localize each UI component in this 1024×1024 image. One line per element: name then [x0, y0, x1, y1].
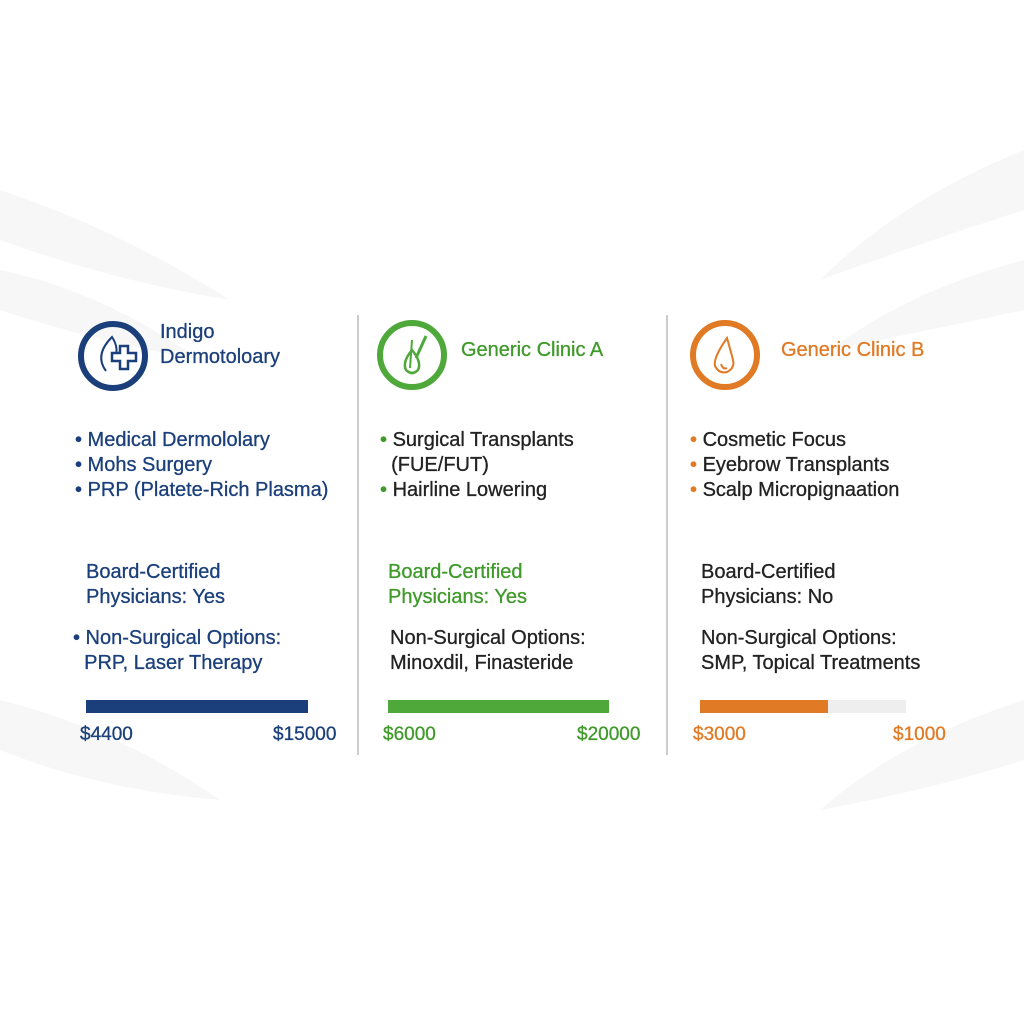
panel: Indigo: [73, 321, 336, 745]
list: [380, 429, 574, 501]
board: [388, 561, 527, 608]
non-surgical: Non-Surgical Options:: [701, 627, 897, 649]
panel: Clinic B: $3000: [693, 724, 746, 745]
price bar: [86, 700, 308, 713]
non-surgical: [390, 627, 586, 674]
panel: Clinic B: $1000: [893, 724, 946, 745]
board: [86, 561, 225, 608]
list: (FUE/FUT): [391, 454, 489, 476]
board: Physicians: No: [701, 586, 833, 608]
panel: Indigo: $4400: [80, 724, 133, 745]
non-surgical: Non-Surgical Options:: [390, 627, 586, 649]
dividers: [357, 315, 359, 755]
icon: leaf cross: [78, 321, 148, 391]
heading: Dermotoloary: [160, 346, 280, 368]
non-surgical: SMP, Topical Treatments: [701, 652, 920, 674]
list: • Cosmetic Focus: [690, 429, 846, 451]
icon: hair drop: [690, 320, 760, 390]
heading: Generic Clinic B: [781, 339, 924, 361]
non-surgical: [701, 627, 920, 674]
non-surgical: PRP, Laser Therapy: [84, 652, 262, 674]
panel: Clinic A: $20000: [577, 724, 640, 745]
list: • Eyebrow Transplants: [690, 454, 889, 476]
list: [690, 429, 899, 501]
price bar: [388, 700, 609, 713]
non-surgical: [73, 627, 281, 674]
list: • Mohs Surgery: [75, 454, 212, 476]
panel: Clinic A: $6000: [383, 724, 436, 745]
list: • Medical Dermololary: [75, 429, 270, 451]
board: Board-Certified: [86, 561, 221, 583]
board: Board-Certified: [701, 561, 836, 583]
panel: Clinic B: [690, 320, 946, 745]
list: • Scalp Micropignaation: [690, 479, 899, 501]
price bar: [700, 700, 906, 713]
non-surgical: • Non-Surgical Options:: [73, 627, 281, 649]
list: • Hairline Lowering: [380, 479, 547, 501]
panel: Indigo: $15000: [273, 724, 336, 745]
list: • Surgical Transplants: [380, 429, 574, 451]
non-surgical: Minoxdil, Finasteride: [390, 652, 573, 674]
board: Physicians: Yes: [86, 586, 225, 608]
icon: hair follicle: [377, 320, 447, 390]
heading: [160, 321, 280, 368]
list: [75, 429, 328, 501]
panel: Clinic A: [377, 320, 640, 745]
board: Physicians: Yes: [388, 586, 527, 608]
list: • PRP (Platete-Rich Plasma): [75, 479, 328, 501]
board: [701, 561, 836, 608]
heading: Indigo: [160, 321, 214, 343]
board: Board-Certified: [388, 561, 523, 583]
heading: Generic Clinic A: [461, 339, 603, 361]
